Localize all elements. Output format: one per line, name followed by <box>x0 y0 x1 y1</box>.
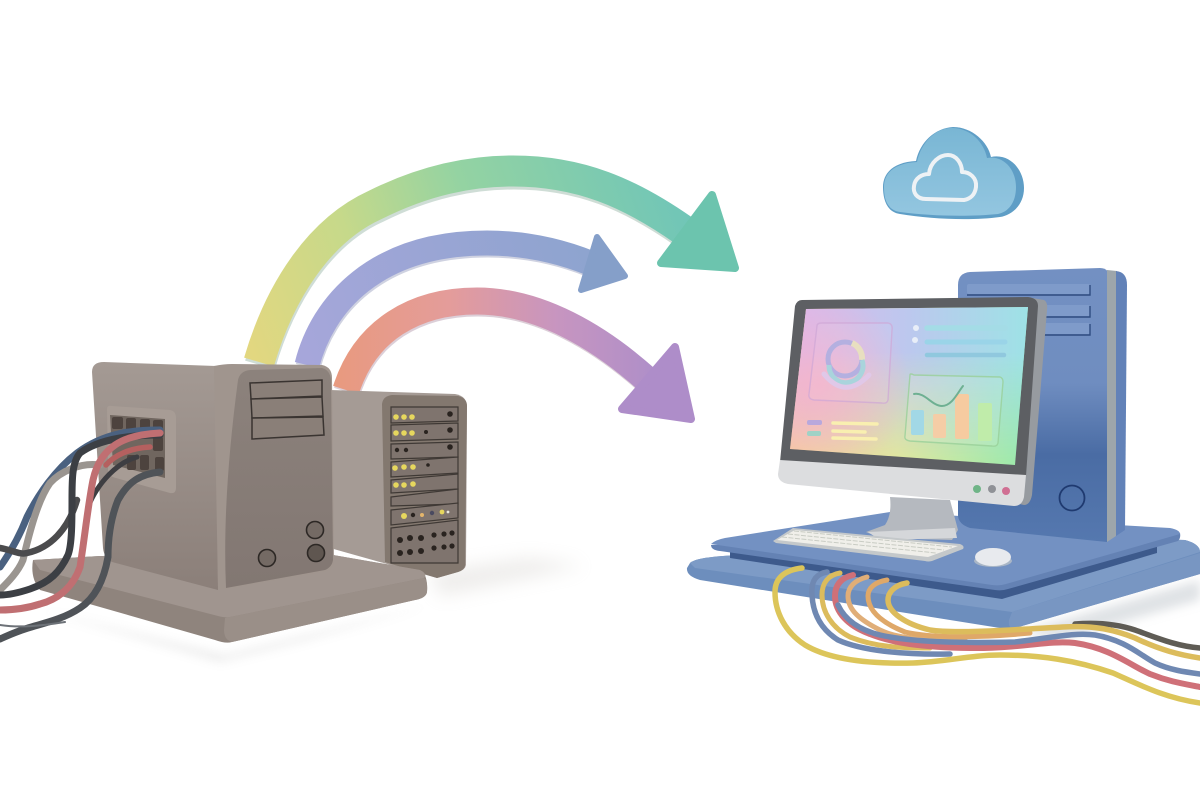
keyboard <box>773 528 964 562</box>
power button <box>1060 486 1084 510</box>
lower desk slab <box>687 535 1200 629</box>
floor shadows <box>40 558 1200 662</box>
legacy cables <box>0 430 160 639</box>
arrow: lower peach-pink-purple <box>346 301 691 419</box>
tower buttons <box>258 522 324 566</box>
desk cables <box>775 568 1200 703</box>
text lines widget <box>912 325 1005 355</box>
bar chart widget <box>905 374 1003 446</box>
illustration: legacy servers migrating to modern computer <box>0 127 1200 706</box>
rack units <box>391 407 458 563</box>
desktop tower <box>958 268 1127 542</box>
arrow: middle lavender-blue <box>307 237 625 367</box>
rack dark holes <box>395 411 455 556</box>
rack lights <box>392 414 449 519</box>
screen <box>790 307 1028 465</box>
port block <box>107 406 176 493</box>
monitor stand <box>866 497 958 540</box>
icon: cloud <box>883 127 1024 219</box>
drive bays <box>250 380 324 439</box>
monitor indicator lights <box>973 485 1010 495</box>
arrow: large yellow-green-teal <box>259 171 735 365</box>
upper desk slab <box>711 512 1180 599</box>
monitor <box>778 297 1047 506</box>
cloud outline glyph <box>914 155 976 200</box>
mouse <box>974 548 1012 567</box>
tower vents <box>967 284 1090 334</box>
legend widget <box>807 420 877 439</box>
back server rack <box>330 390 467 578</box>
donut widget <box>809 323 892 403</box>
legacy tower <box>92 362 334 590</box>
base slab under legacy tower <box>32 555 427 643</box>
